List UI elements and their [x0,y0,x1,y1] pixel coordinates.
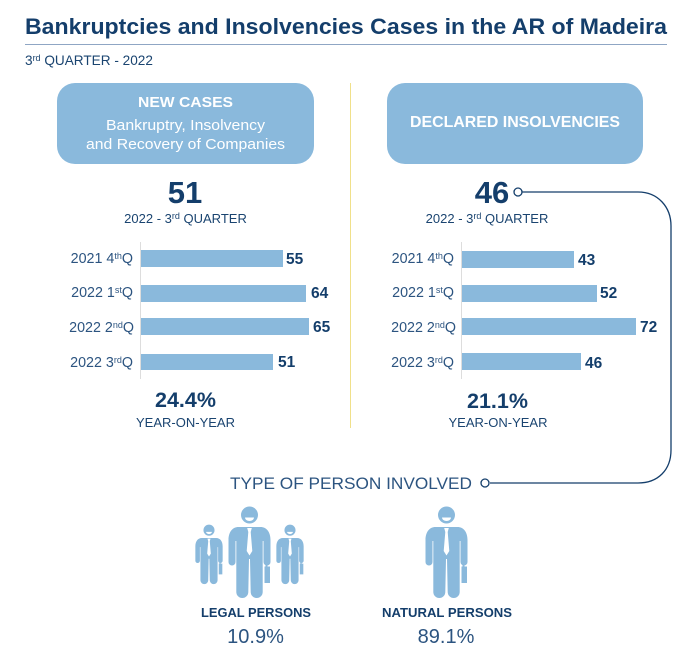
bar chart: declared insolvencies: th [435,251,443,261]
bar chart: new cases: Q [123,320,134,336]
bar chart: declared insolvencies: 43 [578,252,596,269]
bar chart: new cases: 55 [286,251,304,268]
bar chart: declared insolvencies: 2022 3 [391,355,435,371]
new cases total: rd [172,211,180,221]
panel: declared insolvencies: DECLARED INSOLVENCIES [410,114,620,131]
declared insolvencies total: 46 [475,175,509,210]
year-on-year: new cases: 24.4% [155,388,216,412]
bar chart: new cases: Q [122,355,133,371]
bar chart: new cases: 2022 3 [70,355,114,371]
new cases total: QUARTER [180,211,247,226]
bar chart: declared insolvencies: Q [443,251,454,267]
natural persons stat [382,605,512,648]
new cases total: 51 [168,175,202,210]
bar chart: new cases: rd [114,355,122,365]
new cases total: 2022 - 3 [124,211,172,226]
bar chart: declared insolvencies: 2022 1 [392,285,436,301]
subtitle: QUARTER - 2022 [41,53,153,68]
year-on-year: declared insolvencies: YEAR-ON-YEAR [449,415,547,430]
year-on-year: new cases: YEAR-ON-YEAR [136,415,235,430]
bar chart: declared insolvencies: 46 [585,355,603,372]
natural persons stat: 89.1% [418,626,475,648]
bar chart: new cases: Q [122,251,133,267]
subtitle: rd [33,53,41,63]
bar chart: declared insolvencies: 52 [600,285,617,302]
bar chart: declared insolvencies: Q [443,285,454,301]
legal persons stat [201,605,311,648]
panel: new cases [57,83,314,164]
bar chart: declared insolvencies: nd [435,320,445,330]
bar chart: declared insolvencies: rd [435,355,443,365]
bar chart: new cases: 2022 1 [71,285,115,301]
bar chart: declared insolvencies: 72 [640,319,657,336]
bar chart: new cases: 64 [311,285,329,302]
bar chart: declared insolvencies: Q [443,355,454,371]
title: Bankruptcies and Insolvencies Cases in the AR of Madeira [25,14,668,39]
bar chart: new cases: th [114,251,122,261]
panel: new cases: and Recovery of Companies [86,137,285,153]
icon: legal persons [195,506,304,598]
declared insolvencies total: 2022 - 3 [426,211,473,226]
bar chart: declared insolvencies [391,242,657,379]
bar chart: new cases: st [115,285,122,295]
natural persons stat: NATURAL PERSONS [382,605,512,620]
legal persons stat: 10.9% [227,626,284,648]
panel: new cases: Bankruptry, Insolvency [106,118,266,134]
bar chart: declared insolvencies: 2022 2 [391,320,435,336]
bar chart: new cases: nd [113,320,123,330]
declared insolvencies total: rd [473,211,481,221]
bar chart: new cases [69,242,331,379]
panel: new cases: NEW CASES [138,94,233,111]
new cases total [124,175,247,226]
year-on-year: declared insolvencies: 21.1% [467,389,528,413]
connector arrow [481,188,671,487]
bar chart: declared insolvencies: Q [445,320,456,336]
bar chart: new cases: 2022 2 [69,320,113,336]
year-on-year: declared insolvencies [449,389,547,430]
legal persons stat: LEGAL PERSONS [201,605,311,620]
subtitle: 3 [25,53,33,68]
panel: declared insolvencies [387,83,643,164]
year-on-year: new cases [136,388,235,430]
icon: natural person [426,506,468,598]
bar chart: declared insolvencies: st [436,285,443,295]
bar chart: new cases: 51 [278,354,296,371]
bar chart: new cases: 2021 4 [71,251,114,267]
declared insolvencies total: QUARTER [481,211,548,226]
bar chart: declared insolvencies: 2021 4 [392,251,435,267]
heading: type of person involved: TYPE OF PERSON INVOLVED [230,474,472,493]
bar chart: new cases: Q [122,285,133,301]
declared insolvencies total [426,175,548,226]
bar chart: new cases: 65 [313,319,331,336]
